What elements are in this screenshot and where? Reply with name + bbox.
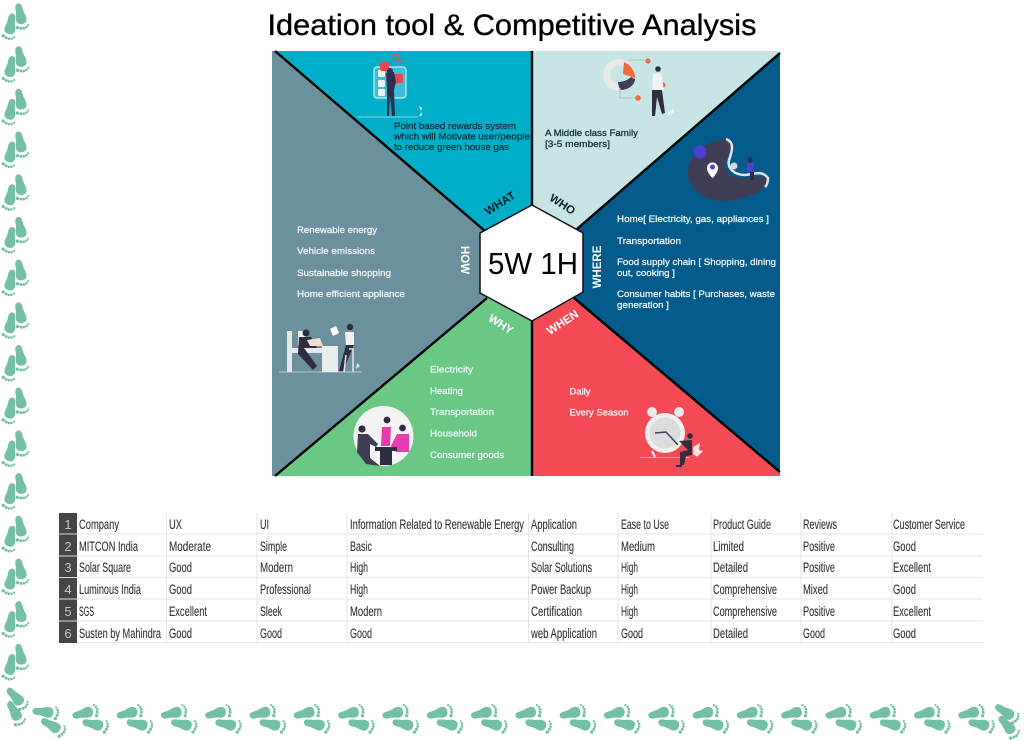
row: SGS: High: [621, 604, 638, 619]
row: Solar Square: High: [621, 560, 638, 575]
row: Luminous India: Mixed: [803, 582, 828, 597]
header row: UX: [169, 517, 182, 532]
row number column: 3: [64, 560, 72, 575]
row: Susten by Mahindra: Good: [350, 626, 372, 641]
text: how: Vehicle emissions: [297, 246, 375, 257]
icon: team meeting: [354, 406, 414, 466]
text: what: to reduce green house gas: [394, 142, 509, 153]
icon: chart person: [606, 58, 674, 116]
text: why: Transportation: [430, 407, 494, 418]
text: how: Home efficient appliance: [297, 289, 405, 300]
row: SGS: [79, 604, 931, 619]
5W 1H diagram: [272, 51, 780, 476]
panel: why: [275, 298, 532, 476]
row: MITCON India: Positive: [803, 539, 835, 554]
text: where: out, cooking ]: [617, 268, 675, 279]
row: Solar Square: Modern: [260, 560, 293, 575]
text: who: A Middle class Family: [545, 128, 638, 139]
text: how: [297, 225, 405, 300]
row: MITCON India: [79, 539, 916, 554]
text: how: Renewable energy: [297, 225, 377, 236]
text: why: Household: [430, 428, 477, 440]
header row: Information Related to Renewable Energy: [350, 517, 524, 532]
row: SGS: Certification: [531, 604, 582, 619]
icon: checklist person: [357, 54, 422, 117]
row: Susten by Mahindra: Good: [893, 626, 916, 641]
header row: Company: [79, 517, 119, 532]
row: MITCON India: Moderate: [169, 539, 211, 554]
row number column: 2: [64, 539, 72, 554]
panel: when: [532, 298, 780, 476]
row number column: [59, 513, 77, 643]
header row: Application: [531, 517, 577, 532]
competitive analysis table: [59, 513, 983, 643]
row: SGS: Positive: [803, 604, 835, 619]
text: when: [570, 386, 628, 418]
label: where: WHERE: [592, 245, 604, 288]
text: when: Daily: [570, 386, 591, 398]
text: why: Electricity: [430, 364, 473, 376]
header row: Reviews: [803, 517, 837, 532]
text: where: Food supply chain [ Shopping, dining: [617, 257, 776, 268]
row: SGS: Excellent: [169, 604, 207, 619]
row: Solar Square: Solar Solutions: [531, 560, 592, 575]
panel: what: [275, 51, 532, 231]
row: SGS: SGS: [79, 604, 94, 619]
row: Luminous India: Professional: [260, 582, 311, 597]
text: what: [393, 121, 530, 153]
row: Susten by Mahindra: Good: [621, 626, 643, 641]
row: Luminous India: [79, 582, 916, 597]
center hexagon: [480, 205, 583, 321]
row: Susten by Mahindra: web Application: [530, 626, 597, 641]
row: Luminous India: Luminous India: [79, 582, 141, 597]
row: Solar Square: [79, 560, 931, 575]
row: MITCON India: Medium: [621, 539, 655, 554]
row: Susten by Mahindra: Good: [169, 626, 192, 641]
text: how: Sustainable shopping: [297, 268, 391, 279]
row: Solar Square: Solar Square: [79, 560, 131, 575]
row: SGS: Sleek: [260, 604, 282, 619]
row: SGS: Modern: [350, 604, 382, 619]
row: MITCON India: Simple: [260, 539, 287, 554]
text: when: Every Season: [570, 408, 628, 418]
label: why: WHY: [486, 313, 515, 338]
row: SGS: Comprehensive: [713, 604, 777, 619]
row: Solar Square: Detailed: [713, 560, 748, 575]
row: Luminous India: Comprehensive: [713, 582, 777, 597]
header row: [79, 517, 965, 532]
row number column: 1: [64, 517, 72, 532]
text: why: Heating: [430, 386, 463, 397]
row: MITCON India: Consulting: [531, 539, 574, 554]
header row: UI: [260, 517, 269, 532]
row: Luminous India: Good: [893, 582, 916, 597]
row: Susten by Mahindra: Good: [260, 626, 282, 641]
row: MITCON India: Basic: [350, 539, 372, 554]
text: what: which will Motivate user/people: [393, 132, 530, 142]
row: Solar Square: Good: [169, 560, 192, 575]
row: Susten by Mahindra: Good: [803, 626, 825, 641]
row: Solar Square: High: [350, 560, 368, 575]
row number column: 5: [64, 604, 72, 619]
center label: 5W 1H: [488, 246, 578, 281]
row: SGS: Excellent: [893, 604, 931, 619]
row: Solar Square: Positive: [803, 560, 835, 575]
row: MITCON India: MITCON India: [79, 539, 138, 554]
row number column: 6: [64, 626, 72, 641]
row number column: 4: [64, 582, 72, 597]
text: where: generation ]: [617, 300, 669, 311]
label: what: WHAT: [483, 190, 518, 218]
text: where: Transportation: [617, 236, 681, 247]
icon: alarm clock person: [640, 407, 703, 467]
title: Ideation tool & Competitive Analysis: [268, 9, 756, 42]
row: Susten by Mahindra: Detailed: [713, 626, 748, 641]
text: what: Point based rewards system: [394, 121, 516, 132]
text: who: [545, 128, 638, 150]
row: Susten by Mahindra: [79, 626, 916, 641]
text: where: Home[ Electricity, gas, appliances ]: [617, 214, 769, 225]
row: Luminous India: High: [350, 582, 368, 597]
divider lines: [275, 51, 780, 476]
header row: Ease to Use: [621, 517, 669, 532]
row: Luminous India: Power Backup: [531, 582, 591, 597]
text: where: Consumer habits [ Purchases, waste: [617, 289, 775, 300]
text: why: Consumer goods: [430, 450, 504, 461]
text: why: [430, 364, 504, 461]
row: MITCON India: Limited: [713, 539, 744, 554]
row: MITCON India: Good: [893, 539, 916, 554]
label: when: WHEN: [545, 308, 581, 338]
header row: Product Guide: [713, 517, 771, 532]
panel: where: [574, 53, 780, 472]
row: Solar Square: Excellent: [893, 560, 931, 575]
icon: map location blob: [688, 139, 768, 201]
text: who: [3-5 members]: [545, 139, 610, 150]
row: Luminous India: Good: [169, 582, 192, 597]
header row: Customer Service: [893, 517, 965, 532]
panel: who: [532, 51, 780, 229]
panel: how: [272, 51, 487, 476]
row: Luminous India: High: [621, 582, 638, 597]
text: where: [617, 214, 776, 311]
icon: office workers: [279, 324, 362, 372]
label: how: HOW: [458, 246, 470, 274]
label: who: WHO: [547, 192, 577, 218]
row: Susten by Mahindra: Susten by Mahindra: [79, 626, 161, 641]
